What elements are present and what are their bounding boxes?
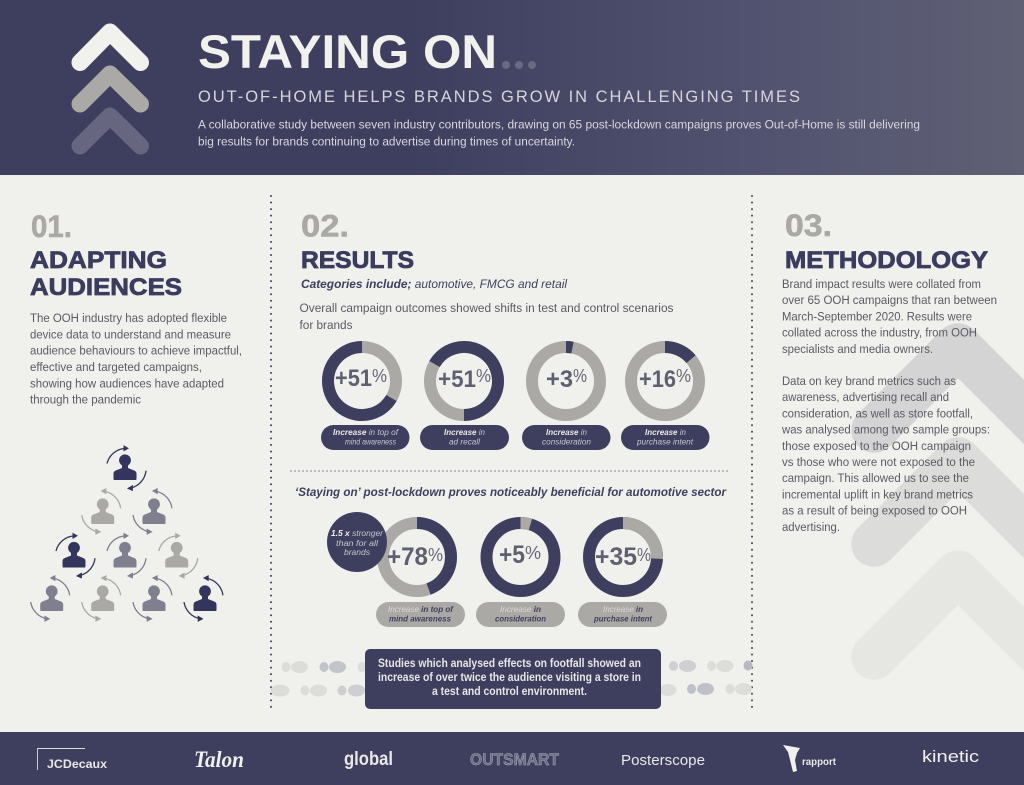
heading: [30, 247, 182, 301]
callout: 1.5x stronger: than for all: [336, 538, 379, 548]
callout: footfall: Studies which analysed effects on footfall showed an: [378, 656, 641, 670]
title ellipsis dots: [502, 61, 536, 69]
title: STAYING ON: [198, 26, 497, 79]
pill: automotive consideration: Increase in: [500, 604, 541, 614]
pill: automotive top of mind awareness: mind awareness: [389, 614, 451, 624]
overview text: Overall campaign outcomes showed shifts in test and control scenarios: [300, 301, 674, 315]
donut: ad recall +51%: %: [476, 365, 491, 386]
dotted column dividers: [271, 196, 752, 710]
logo: OUTSMART: OUTSMART: [470, 751, 559, 769]
logo: rapport: [783, 745, 837, 772]
overview text: [300, 301, 674, 332]
callout: 1.5x stronger: brands: [344, 547, 371, 557]
body text: effective and targeted campaigns,: [30, 360, 202, 374]
donut: consideration +3%: +3: [546, 366, 573, 393]
logo: Talon: Talon: [194, 747, 244, 772]
donut: automotive top of mind awareness +78%: +78: [387, 543, 428, 571]
logo: Posterscope: Posterscope: [621, 753, 705, 769]
body text: The OOH industry has adopted flexible: [30, 311, 227, 325]
background chevrons watermark: [874, 346, 1024, 715]
pill: ad recall: Increase in: [444, 427, 485, 437]
pill: automotive consideration: [476, 602, 565, 627]
callout: 1.5x stronger: [327, 512, 387, 572]
donut: automotive top of mind awareness +78%: %: [428, 544, 443, 565]
subtitle: OUT-OF-HOME HELPS BRANDS GROW IN CHALLENGING TIMES: [198, 88, 800, 106]
callout: footfall: a test and control environment.: [432, 684, 587, 698]
callout: 1.5x stronger: 1.5 x stronger: [331, 528, 384, 538]
footprints: [270, 660, 752, 696]
methodology body text: those exposed to the OOH campaign: [782, 439, 971, 453]
donut: automotive purchase intent +35%: [589, 523, 657, 591]
pill: automotive top of mind awareness: Increase in top of: [388, 604, 454, 614]
dotted section divider: [291, 470, 731, 472]
donut: consideration +3%: %: [573, 365, 587, 386]
methodology body text: advertising.: [782, 520, 840, 534]
section number 03: 03.: [785, 207, 832, 243]
logo: rapport: rapport: [802, 757, 837, 768]
section number 01: 01.: [31, 208, 72, 244]
methodology body text: [781, 277, 997, 534]
donut: automotive consideration +5%: [486, 523, 554, 591]
donut: purchase intent +16%: [631, 347, 699, 415]
donut: automotive purchase intent +35%: +35: [595, 543, 637, 571]
methodology body text: specialists and media owners.: [782, 342, 933, 356]
panel: results: [270, 208, 752, 709]
donut: automotive top of mind awareness +78%: [327, 512, 451, 591]
intro text: [198, 118, 920, 148]
donut: top of mind awareness +51%: %: [372, 365, 387, 386]
pill: consideration: [522, 425, 610, 450]
logo: JCDecaux: JCDecaux: [47, 759, 108, 771]
heading: AUDIENCES: [30, 274, 182, 301]
overview text: for brands: [300, 318, 352, 332]
pill: automotive top of mind awareness: [376, 602, 465, 627]
callout: footfall: increase of over twice the audience visiting a store in: [378, 670, 641, 684]
automotive subheading: ‘Staying on’ post-lockdown proves noticeably beneficial for automotive sector: [295, 485, 727, 499]
logo: kinetic: kinetic: [922, 747, 980, 766]
heading: RESULTS: [301, 247, 414, 274]
header banner: [0, 0, 1024, 175]
body text: showing how audiences have adapted: [30, 376, 224, 390]
donut: automotive purchase intent +35%: %: [637, 544, 651, 565]
pill: automotive consideration: consideration: [495, 614, 546, 624]
pill: ad recall: [420, 425, 509, 450]
body text: [30, 311, 242, 407]
pill: consideration: Increase in: [546, 427, 587, 437]
panel: adapting audiences: [30, 208, 242, 621]
donut: top of mind awareness +51%: [316, 335, 408, 427]
logo: global: global: [344, 749, 393, 770]
body text: device data to understand and measure: [30, 327, 231, 341]
methodology body text: March-September 2020. Results were: [782, 309, 972, 323]
methodology body text: campaign. This allowed us to see the: [782, 471, 969, 485]
methodology body text: vs those who were not exposed to the: [782, 455, 975, 469]
panel: methodology: [781, 207, 997, 534]
donut: purchase intent +16%: +16: [639, 366, 676, 393]
pill: automotive purchase intent: [578, 602, 667, 627]
pill: top of mind awareness: mind awareness: [345, 436, 397, 446]
pill: purchase intent: [621, 425, 710, 450]
pill: consideration: consideration: [542, 436, 591, 446]
methodology body text: Brand impact results were collated from: [782, 277, 981, 291]
donut: automotive consideration +5%: +5: [499, 541, 525, 569]
methodology body text: awareness, advertising recall and: [782, 390, 949, 404]
methodology body text: Data on key brand metrics such as: [782, 374, 956, 388]
pill: top of mind awareness: Increase in top of: [333, 427, 400, 437]
categories line: Categories include; automotive, FMCG and retail: [301, 277, 568, 291]
donut: top of mind awareness +51%: +51: [335, 365, 372, 392]
intro text: A collaborative study between seven industry contributors, drawing on 65 post-lockdown campaigns proves Out-of-Home is still delivering: [198, 118, 920, 132]
pill: automotive purchase intent: Increase in: [603, 604, 643, 614]
body text: through the pandemic: [30, 393, 141, 407]
methodology body text: collated across the industry, from OOH: [782, 326, 977, 340]
section number 02: 02.: [301, 208, 349, 244]
pill: top of mind awareness: [321, 425, 410, 450]
methodology body text: over 65 OOH campaigns that ran between: [782, 293, 997, 307]
logo: JCDecaux: [38, 748, 108, 771]
donut: automotive consideration +5%: %: [525, 542, 541, 563]
intro text: big results for brands continuing to advertise during times of uncertainty.: [198, 134, 575, 148]
icon: rising chevrons: [80, 32, 140, 146]
heading: METHODOLOGY: [785, 247, 988, 274]
pill: purchase intent: purchase intent: [636, 436, 694, 446]
donut: ad recall +51%: [418, 335, 510, 427]
donut: purchase intent +16%: %: [676, 365, 691, 386]
methodology body text: as a result of being exposed to OOH: [782, 504, 967, 518]
methodology body text: was analysed among two sample groups:: [781, 423, 990, 437]
icon: audience pyramid: [31, 446, 223, 621]
donut: ad recall +51%: +51: [438, 366, 476, 393]
heading: ADAPTING: [30, 247, 167, 274]
donut: consideration +3%: [532, 347, 600, 415]
methodology body text: consideration, as well as store footfall,: [782, 406, 973, 420]
methodology body text: incremental uplift in key brand metrics: [782, 487, 973, 501]
pill: automotive purchase intent: purchase intent: [593, 614, 653, 624]
pill: purchase intent: Increase in: [645, 427, 686, 437]
body text: audience behaviours to achieve impactful,: [30, 344, 242, 358]
footer logo bar: [0, 732, 1024, 785]
callout: footfall: [365, 649, 661, 709]
pill: ad recall: ad recall: [449, 436, 481, 446]
